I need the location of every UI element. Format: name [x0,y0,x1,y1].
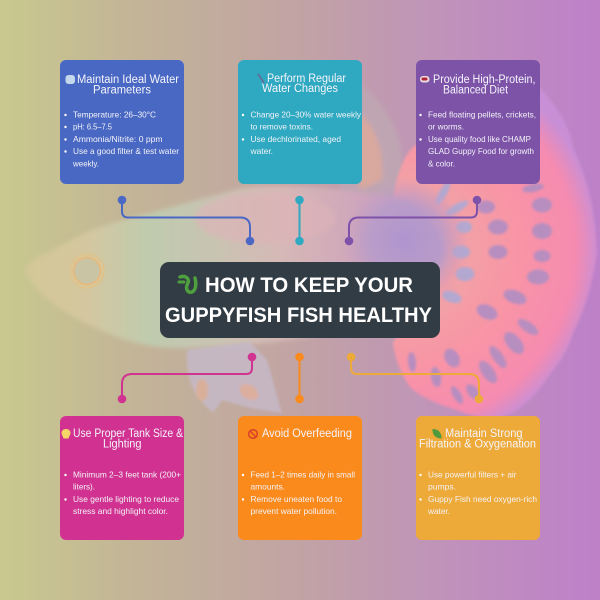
panel: water changes [238,60,362,184]
heading: water parameters: Parameters [93,84,151,96]
title text [165,273,432,327]
heading: diet [433,74,536,96]
panel: tank size [60,416,184,540]
icon: water [66,75,75,84]
list: diet: & color. [428,158,455,168]
connector: teal [295,196,304,245]
fish body [25,186,445,348]
list: tank size: stress and highlight color. [73,506,168,516]
title text: GUPPYFISH FISH HEALTHY [165,303,432,327]
list: tank size: Minimum 2–3 feet tank (200+ [73,470,181,480]
heading: diet: Provide High-Protein, [433,74,536,86]
connector: purple [345,196,481,245]
panel: filtration [416,416,540,540]
list: tank size: liters). [73,482,95,492]
icon: leaf [432,429,442,438]
heading: tank size: Lighting [103,438,142,450]
panel: diet [416,60,540,184]
ventral fin [187,342,282,413]
title text: HOW TO KEEP YOUR [205,273,413,297]
dorsal fin [340,80,402,205]
connector: blue [118,196,254,245]
heading: water changes [262,73,346,95]
list: diet [419,110,536,168]
list: diet: GLAD Guppy Food for growth [428,146,534,156]
list: tank size [64,470,181,516]
icon: light bulb [62,429,70,438]
connector: pink [118,353,256,403]
list: overfeeding: Remove uneaten food to [250,494,342,504]
list: diet: Feed floating pellets, crickets, [428,110,536,120]
peduncle [343,178,467,302]
heading: water changes: Water Changes [262,83,338,95]
list: overfeeding: Feed 1–2 times daily in small [250,470,355,480]
list: filtration: Use powerful filters + air [428,470,517,480]
heading: water parameters: Maintain Ideal Water [77,74,179,86]
list: diet: or worms. [428,122,464,132]
list: diet: Use quality food like CHAMP [428,134,531,144]
fish eye [70,254,104,288]
list: water changes: Change 20–30% water weekly [250,110,362,120]
heading: filtration [419,428,536,450]
list: water changes: water. [249,146,273,156]
tail spots [407,182,552,406]
list: filtration: pumps. [428,482,456,492]
heading: filtration: Filtration & Oxygenation [419,438,536,450]
list: water parameters: Use a good filter & test water [73,146,179,156]
list: water parameters: weekly. [72,158,99,168]
list: overfeeding [242,470,355,516]
heading: water changes: Perform Regular [267,73,346,85]
list: water parameters: Temperature: 26–30°C [73,110,156,120]
tail blue marks [433,180,474,306]
heading: overfeeding: Avoid Overfeeding [262,428,352,440]
list: water changes: to remove toxins. [250,122,313,132]
list: water parameters: Ammonia/Nitrite: 0 ppm [73,134,163,144]
title panel [160,262,440,338]
icon: meat [420,76,430,82]
list: overfeeding: prevent water pollution. [250,506,337,516]
panel: water parameters [60,60,184,184]
heading: water parameters [77,74,179,96]
list: filtration: Guppy Fish need oxygen-rich [428,494,537,504]
list: tank size: Use gentle lighting to reduce [73,494,179,504]
icon: no entry [249,430,257,438]
heading: tank size: Use Proper Tank Size & [73,428,183,440]
panel: overfeeding [238,416,362,540]
list: water parameters [64,110,179,168]
body pink upper patch [195,192,335,244]
tail fin [393,87,597,417]
list: water changes: Use dechlorinated, aged [250,134,341,144]
fish illustration [25,80,597,417]
connector: yellow [347,353,483,403]
list: water parameters: pH: 6.5–7.5 [73,122,112,132]
heading: filtration: Maintain Strong [445,428,522,440]
list: overfeeding: amounts. [250,482,285,492]
icon: wrench [258,74,264,83]
list: water changes [242,110,362,156]
heading: tank size [73,428,183,450]
connector: orange [295,353,304,403]
heading: diet: Balanced Diet [443,84,509,96]
list: filtration: water. [427,506,450,516]
list: filtration [419,470,537,516]
icon: dragon [179,276,196,292]
